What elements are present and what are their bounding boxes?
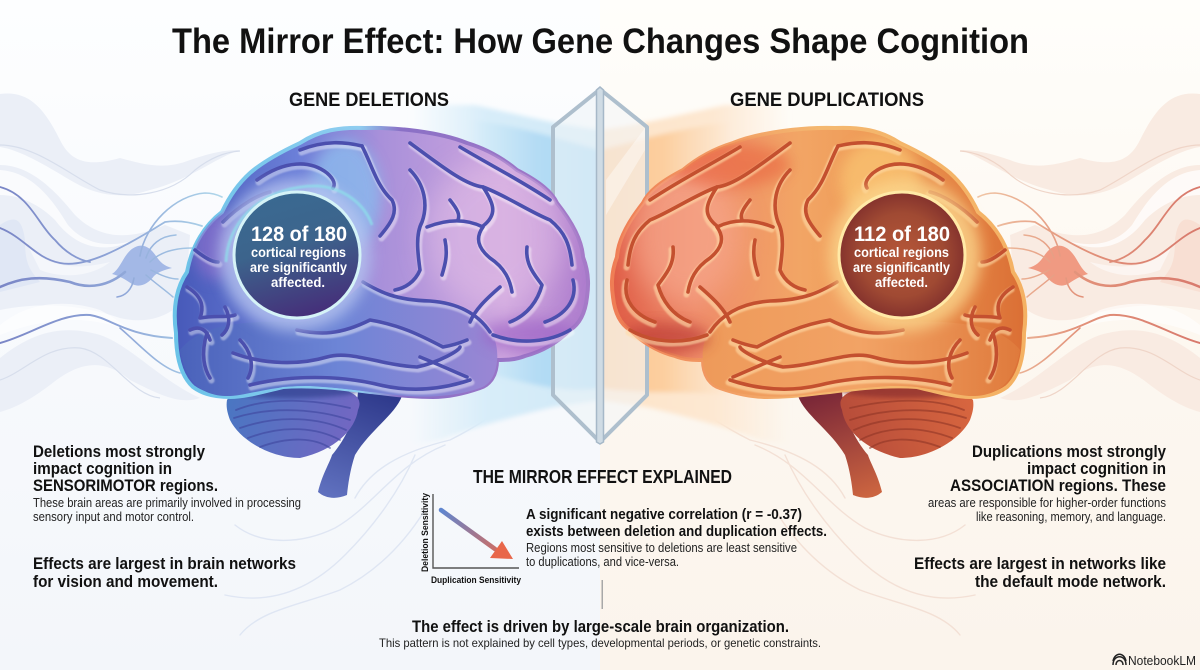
heading: the mirror effect explained: THE MIRROR EFFECT EXPLAINED — [473, 467, 732, 487]
text block: deletions: sensory input and motor control. — [33, 510, 194, 524]
chart: deletion vs duplication sensitivity — [420, 492, 522, 586]
faint lines: left bottom — [225, 395, 520, 635]
text block: duplications: like reasoning, memory, and language. — [976, 510, 1166, 524]
neural waves: left — [0, 93, 240, 412]
cerebral cortex — [175, 128, 588, 397]
text block: deletions: for vision and movement. — [33, 573, 218, 591]
text block: large-scale organization — [379, 618, 821, 650]
logo: NotebookLM: NotebookLM — [1128, 653, 1196, 668]
text block: deletions — [33, 443, 301, 591]
text block: deletions: These brain areas are primarily involved in processing — [33, 496, 301, 510]
text block: correlation: Regions most sensitive to deletions are least sensitive — [526, 541, 797, 555]
text block: correlation: to duplications, and vice-versa. — [526, 555, 679, 569]
left brain: blue-purple — [175, 128, 588, 498]
heading: gene duplications: GENE DUPLICATIONS — [730, 89, 924, 111]
text block: duplications: the default mode network. — [975, 573, 1166, 591]
neural waves: right — [960, 93, 1200, 412]
text block: duplications: impact cognition in — [1027, 460, 1166, 478]
brainstem — [318, 388, 402, 498]
right brain: red-orange — [612, 128, 1025, 498]
text block: large-scale organization: This pattern is not explained by cell types, developmental periods, or genetic constraints. — [379, 636, 821, 650]
text block: large-scale organization: The effect is driven by large-scale brain organization. — [412, 618, 789, 636]
text block: duplications — [914, 443, 1167, 591]
background: right panel — [600, 0, 1200, 670]
glow: blue halo behind left brain — [410, 105, 600, 445]
callout: 112 of 180: 112 of 180 — [854, 223, 950, 246]
callout: 128 of 180: 128 of 180 — [251, 223, 347, 246]
text block: correlation: A significant negative correlation (r = -0.37) — [526, 507, 802, 523]
callout: 112 of 180: affected. — [875, 275, 928, 290]
text block: correlation — [526, 507, 827, 569]
callout: 128 of 180: affected. — [271, 275, 325, 290]
heading: gene deletions: GENE DELETIONS — [289, 89, 449, 111]
text block: duplications: areas are responsible for higher-order functions — [928, 496, 1166, 510]
callout: 112 of 180: cortical regions — [854, 245, 949, 260]
callout: 128 of 180: are significantly — [250, 260, 347, 275]
background: left panel — [0, 0, 600, 670]
faint lines: right bottom — [680, 395, 975, 635]
cerebral cortex — [612, 128, 1025, 397]
cerebellum — [220, 382, 360, 458]
text block: duplications: Effects are largest in networks like — [914, 555, 1166, 573]
callout: 112 of 180 — [829, 179, 981, 331]
callout: 128 of 180: cortical regions — [251, 245, 346, 260]
glow: orange halo behind right brain — [600, 105, 790, 445]
text block: deletions: SENSORIMOTOR regions. — [33, 477, 218, 495]
text block: duplications: ASSOCIATION regions. These — [950, 477, 1166, 495]
callout: 128 of 180 — [219, 179, 372, 331]
text block: deletions: impact cognition in — [33, 460, 172, 478]
chart: deletion vs duplication sensitivity: Deletion Sensitivity — [420, 492, 431, 572]
text block: duplications: Duplications most strongly — [972, 443, 1167, 461]
title: The Mirror Effect: How Gene Changes Shape Cognition — [172, 21, 1029, 61]
text block: correlation: exists between deletion and duplication effects. — [526, 524, 827, 540]
text block: deletions: Deletions most strongly — [33, 443, 206, 461]
chart: deletion vs duplication sensitivity: Duplication Sensitivity — [431, 575, 522, 586]
mirror: glass panel — [553, 87, 647, 444]
text block: deletions: Effects are largest in brain networks — [33, 555, 296, 573]
brainstem — [798, 388, 882, 498]
callout: 112 of 180: are significantly — [853, 260, 950, 275]
cerebellum — [840, 382, 980, 458]
